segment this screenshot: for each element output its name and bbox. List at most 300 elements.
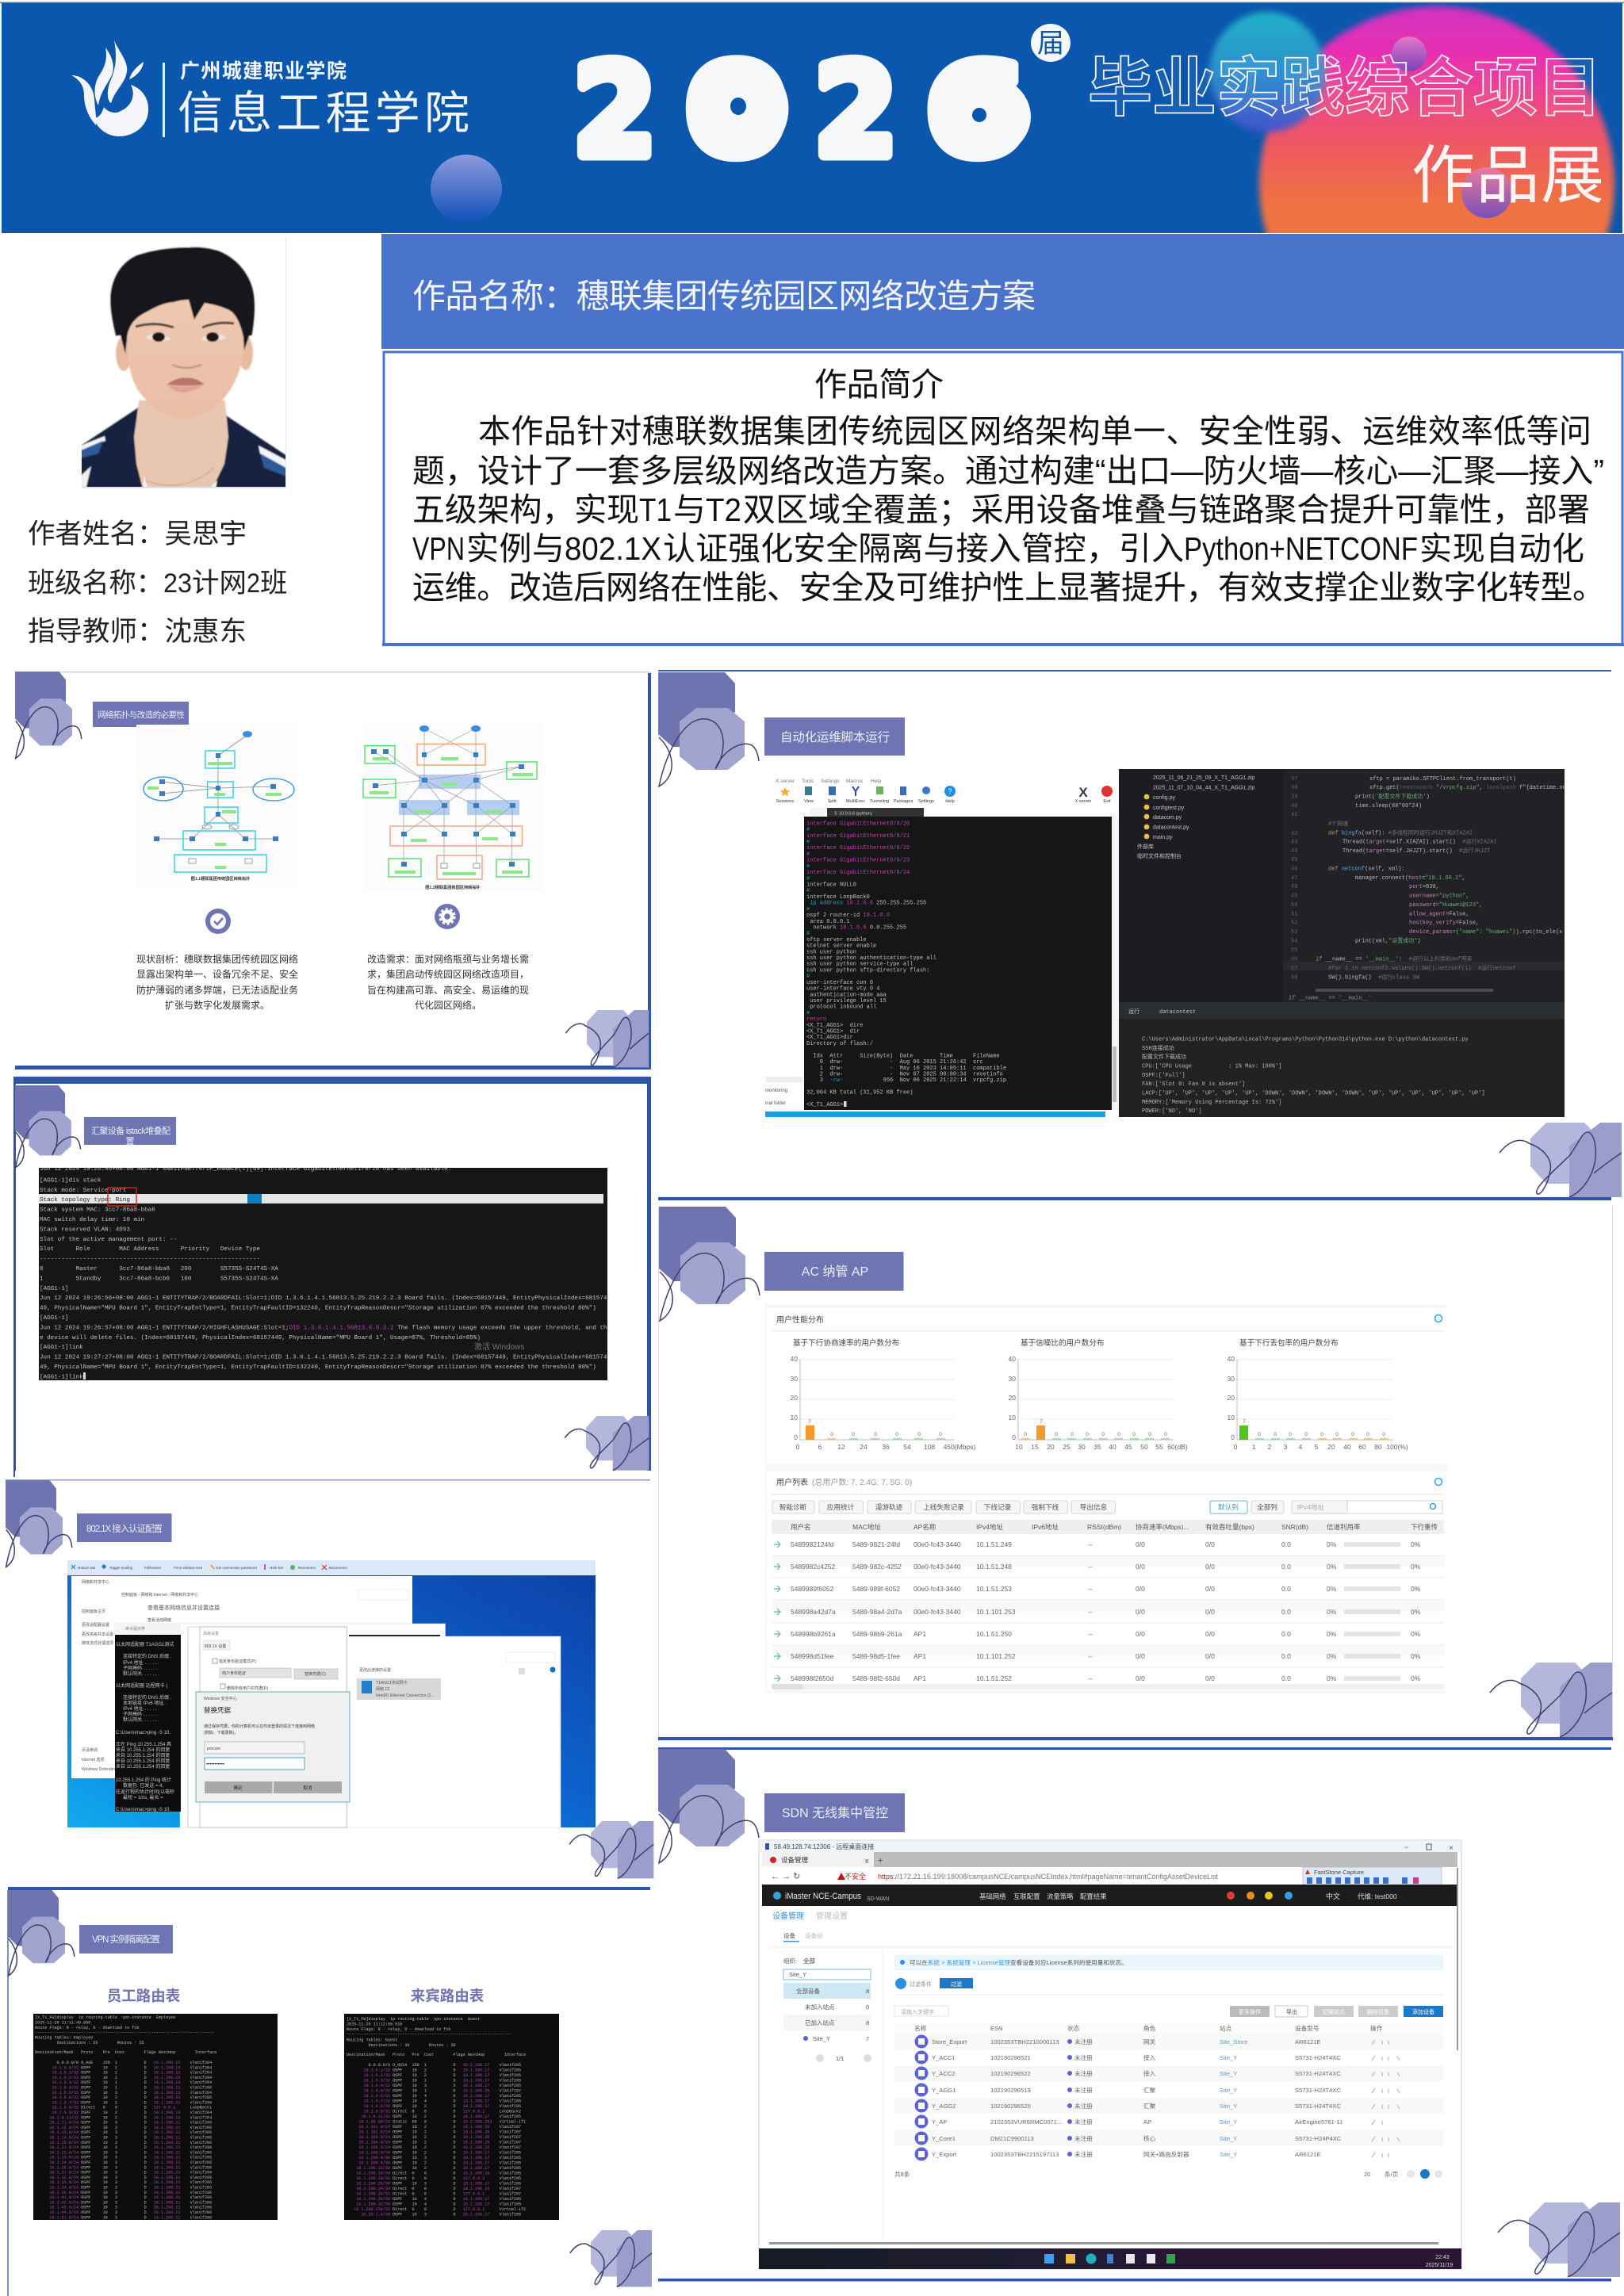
file tree: main.py — [1153, 835, 1173, 840]
card: user list: -- — [1088, 1674, 1093, 1682]
bar chart: packet loss rate: 0 — [1304, 1432, 1308, 1437]
source code: if __name__ == '__main__': #运行以上的类和def用来 — [1316, 955, 1472, 962]
device table: Site_Store — [1220, 2038, 1247, 2045]
card: user list: MAC地址 — [852, 1523, 881, 1531]
source code: device_params={"name": "huawei"}).rpc(to_ele(x — [1409, 929, 1562, 936]
panel heading label: 汇聚设备 istack堆叠配 — [91, 1125, 170, 1136]
card: user list: -- — [1088, 1563, 1093, 1571]
source code: 51 — [1291, 912, 1297, 918]
terminal: guest routing table: 10.1.0.6/32 OSPF 10 4 D 10.1.200.17 Vlanif205 — [347, 2094, 521, 2099]
card: user list: 00e0-fc43-3440 — [914, 1585, 961, 1593]
terminal text: <X_T1_AGG1> dire — [806, 1023, 863, 1029]
eyes — [145, 333, 227, 341]
card: user list: 0/0 — [1136, 1585, 1145, 1593]
bar chart: negotiated rate: 0 — [874, 1432, 877, 1437]
terminal: employee routing table: 10.1.0.1/32 OSPF 10 2 D 10.1.200.13 Vlanif204 — [35, 2071, 212, 2076]
file tree: datacom.py — [1153, 815, 1182, 821]
terminal text: 0 drw- - Aug 06 2015 21:26:42 src — [806, 1059, 983, 1066]
card: user list: 00e0-fc43-3440 — [914, 1540, 961, 1548]
source code: 37 — [1291, 776, 1297, 783]
device table: 1002353TBH2215197113 — [990, 2151, 1059, 2158]
device table — [894, 2023, 1443, 2178]
panel heading label — [764, 1793, 905, 1832]
card: user list: 10.1.51.250 — [976, 1630, 1012, 1638]
card: user performance distribution: 基于下行协商速率的用户数分布 — [793, 1338, 900, 1348]
screenshot: iMaster NCE-Campus device list: 58.49.128.74:12306 - 远程桌面连接 — [774, 1843, 874, 1850]
terminal: guest routing table: 10.1.0.4/32 OSPF 10 3 D 10.1.200.17 Vlanif205 — [347, 2084, 521, 2088]
screenshot: windows 802.1X credentials — [67, 1560, 596, 1827]
source code: 55 — [1291, 947, 1297, 954]
screenshot: iMaster NCE-Campus device list: 设备组 — [805, 1931, 823, 1939]
card: user list: -- — [1088, 1630, 1093, 1638]
terminal: employee routing table: 10.1.0.5/32 OSPF 10 2 D 10.1.200.13 Vlanif204 — [35, 2065, 212, 2070]
device table: 网关 — [1143, 2038, 1156, 2045]
screenshot: windows 802.1X credentials: 替换凭据 — [204, 1706, 232, 1714]
bar chart: signal to noise ratio: 0 — [1024, 1432, 1027, 1437]
terminal text: ssh user python service-type all — [806, 962, 913, 968]
source code: 40 — [1291, 803, 1297, 809]
terminal: guest routing table: 10.20.1.4/30 OSPF 10 3 D 10.1.200.17 Vlanif205 — [347, 2212, 521, 2217]
author info: 23 — [163, 568, 192, 599]
terminal: employee routing table — [33, 2014, 278, 2220]
card: user list: 0/0 — [1136, 1674, 1145, 1682]
terminal text: # — [806, 827, 810, 833]
bar chart: signal to noise ratio: 15 — [1031, 1443, 1039, 1451]
card: user list: 548998a42d7a — [791, 1608, 836, 1616]
bar chart: negotiated rate: 7 — [808, 1419, 811, 1425]
bar chart: packet loss rate: 60 — [1358, 1443, 1366, 1451]
card: user list: 0/0 — [1136, 1563, 1145, 1571]
terminal: employee routing table: 10.1.25.0/24 OSPF 10 3 D 10.1.200.21 Vlanif206 — [35, 2165, 212, 2170]
terminal text: # — [806, 863, 810, 870]
terminal screenshot: stack status: Jun 12 2024 19:26:57+08:00 AGG1-1 ENTITYTRAP/2/HIGHFLASHUSAGE:Slot=1;OID 1.3.6.1.4.1.56813.6.9.3.2 The flash memory usage exceeds the upper threshold, and th — [40, 1325, 607, 1331]
terminal text: sftp server enable — [806, 937, 867, 943]
card: user list: 5489-98b9-261a — [852, 1630, 902, 1638]
terminal text: 32,004 KB total (31,952 KB free) — [806, 1090, 913, 1096]
terminal screenshot: stack status — [39, 1166, 607, 1380]
card: user list: 全部列 — [1257, 1502, 1277, 1511]
terminal: employee routing table: 10.1.0.7/32 OSPF 10 2 D 10.1.200.21 Vlanif206 — [35, 2100, 212, 2105]
terminal: employee routing table: -------------------------------------------------------------------------- — [35, 2030, 214, 2035]
mouth — [167, 378, 205, 385]
terminal text: ssh user python — [806, 949, 856, 955]
terminal: employee routing table: 10.1.0.4/32 OSPF 10 1 D 10.1.200.21 Vlanif206 — [35, 2085, 212, 2090]
bar chart: signal to noise ratio: 0 — [1132, 1432, 1136, 1437]
terminal screenshot: stack status: [AGG1-1] — [40, 1286, 68, 1292]
terminal screenshot: stack status: e device will delete files. (Index=68157449, PhysicalIndex=68157449, PhysicalName="MPU Board 1", Usage=87%, Threshold=85%) — [40, 1335, 481, 1341]
left device tree: 全部设备 — [796, 1987, 820, 1995]
card: user list: 10.1.51.248 — [976, 1563, 1012, 1571]
panel heading label: 自动化运维脚本运行 — [780, 730, 890, 744]
source code — [1128, 776, 1570, 1115]
card: user list: 0% — [1327, 1652, 1337, 1660]
card: user list: 0.0 — [1281, 1563, 1291, 1571]
terminal screenshot: stack status: Stack mode: Service-port — [40, 1188, 126, 1194]
card: user list: 5489982c4252 — [791, 1563, 836, 1571]
bar chart: packet loss rate: 0 — [1289, 1432, 1292, 1437]
panel heading label: AC 纳管 AP — [802, 1265, 868, 1279]
card: user list: 0/0 — [1205, 1652, 1215, 1660]
screenshot: windows 802.1X credentials: 来自 10.255.1.254 的回复 — [116, 1758, 170, 1764]
screenshot: iMaster NCE-Campus device list: + — [878, 1856, 883, 1866]
screenshot: iMaster NCE-Campus device list: 2025/11/19 — [1426, 2263, 1453, 2268]
device table: Site_Y — [1220, 2103, 1237, 2110]
text: current state analysis: 防护薄弱的诸多弊端，已无法适配业务 — [136, 984, 298, 996]
terminal: employee routing table: 10.1.0.2/32 OSPF 10 2 D 10.1.200.13 Vlanif204 — [35, 2076, 212, 2080]
year 2026 — [577, 54, 1031, 162]
card: user list: 0/0 — [1205, 1563, 1215, 1571]
device table: S5731-H24T4XC — [1295, 2054, 1341, 2061]
terminal: guest routing table: 10.1.0.11/32 OSPF 10 2 D 10.1.200.17 Vlanif205 — [347, 2114, 521, 2119]
heading: employee routing table: 员工路由表 — [107, 1988, 181, 2004]
terminal: guest routing table: 10.1.0.8/32 OSPF 10 2 D 10.1.200.17 Vlanif205 — [347, 2104, 521, 2109]
screenshot: iMaster NCE-Campus device list: 导出 — [1286, 2008, 1297, 2015]
terminal: employee routing table: 10.1.15.0/24 OSPF 10 3 D 10.1.200.21 Vlanif206 — [35, 2141, 212, 2145]
bar chart: signal to noise ratio: 30 — [1078, 1443, 1086, 1451]
project introduction box — [382, 352, 1624, 646]
device table: 汇聚 — [1143, 2087, 1156, 2094]
device table: 102190296522 — [990, 2070, 1031, 2077]
terminal: employee routing table: 10.1.11.0/24 OSPF 10 3 D 10.1.200.21 Vlanif206 — [35, 2121, 212, 2126]
terminal text: interface NULL0 — [806, 882, 856, 888]
screenshot: xshell terminal: Exit — [1103, 799, 1111, 804]
terminal: guest routing table: 10.1.200.4/30 OSPF 10 3 D 10.1.200.17 Vlanif205 — [347, 2156, 521, 2160]
device table: 未注册 — [1074, 2134, 1093, 2142]
terminal screenshot: stack status: Jun 12 2024 19:26:46+08:00 AGG1-1 %%01IFNET/4/IF_ENABLE(t)[69]:Interface GigabitEthernet1/0/28 has been available. — [40, 1166, 452, 1173]
device table: Store_Export — [932, 2038, 967, 2045]
screenshot: iMaster NCE-Campus device list: ← → ↻ — [771, 1872, 800, 1881]
panel: VPN instance isolation — [7, 1887, 652, 2296]
bar chart: packet loss rate: 30 — [1228, 1375, 1235, 1383]
screenshot: windows 802.1X credentials: 最短 = 1ms, 最长 = — [123, 1794, 163, 1800]
bar chart: negotiated rate: 0 — [852, 1432, 855, 1437]
terminal: guest routing table: 10.1.200.0/30 OSPF 10 2 D 10.1.200.17 Vlanif205 — [347, 2150, 521, 2155]
device table: Y_Core1 — [932, 2135, 956, 2142]
terminal text: user-interface con 0 — [806, 980, 873, 986]
device table: 20 — [1364, 2171, 1370, 2178]
device table: 102190296519 — [990, 2087, 1031, 2094]
terminal: guest routing table: 10.1.200.16/30 Direct 0 0 D 10.1.200.18 Vlanif205 — [347, 2171, 521, 2175]
screenshot: xshell terminal: Sessions — [776, 799, 795, 804]
screenshot: windows 802.1X credentials: ••••••••••• — [206, 1762, 224, 1767]
screenshot: windows 802.1X credentials: 控制面板主页 — [82, 1609, 105, 1614]
card: user list: 0/0 — [1205, 1608, 1215, 1616]
terminal text: interface GigabitEthernet0/0/21 — [806, 833, 910, 840]
device table: 操作 — [1370, 2024, 1383, 2032]
bar chart: signal to noise ratio: 40 — [1109, 1443, 1116, 1451]
screenshot: windows 802.1X credentials: 来自 10.255.1.254 的回复 — [116, 1763, 170, 1770]
device table: AP — [1143, 2118, 1151, 2126]
bar chart: negotiated rate: 12 — [837, 1443, 845, 1451]
introduction heading: 作品简介 — [814, 366, 944, 403]
panel: aggregation istack configuration — [13, 1077, 651, 1471]
terminal: guest routing table: 10.1.200.20/30 OSPF 10 3 D 10.1.200.17 Vlanif205 — [347, 2182, 521, 2187]
device table: 核心 — [1143, 2134, 1156, 2142]
terminal text: <X_T1_AGG1>dir — [806, 1035, 853, 1041]
source code: def bingfa(self): #多线程同时运行JHJZT和XIAZAI — [1328, 829, 1473, 837]
terminal: employee routing table: 10.1.0.9/32 OSPF 10 2 D 10.1.200.13 Vlanif204 — [35, 2110, 212, 2115]
card: user list: 0.0 — [1281, 1630, 1291, 1638]
card: user list: 5489982124fd — [791, 1540, 834, 1548]
file tree: config.py — [1153, 795, 1176, 801]
year 2026: 2 — [814, 37, 898, 185]
terminal text: # — [806, 839, 810, 845]
card: user list: 0/0 — [1205, 1540, 1215, 1548]
text: renovation requirements: 代化园区网络。 — [415, 999, 481, 1011]
introduction body text: 与 — [673, 492, 706, 528]
screenshot: windows 802.1X credentials: 删除所有用户的凭据(D) — [227, 1686, 268, 1691]
bar chart: packet loss rate — [1228, 1355, 1408, 1451]
screenshot: windows 802.1X credentials: C:\Users\mac>ping -S 10. — [116, 1808, 170, 1812]
screenshot: windows 802.1X credentials: 往返行程的估计时间(以毫秒 — [116, 1789, 174, 1795]
screenshot: iMaster NCE-Campus device list: 不安全 — [845, 1872, 866, 1881]
device table: Y_ACC1 — [932, 2054, 956, 2061]
adapter list window — [180, 1636, 561, 1827]
terminal: guest routing table: 10.1.105.0/24 OSPF 10 2 D 10.1.200.25 Vlanif207 — [347, 2145, 521, 2150]
screenshot: iMaster NCE-Campus device list: iMaster NCE-Campus — [785, 1892, 861, 1901]
bar chart: signal to noise ratio: 20 — [1009, 1394, 1016, 1402]
screenshot: xshell terminal: Help — [945, 799, 955, 804]
screenshot: iMaster NCE-Campus device list: 过滤条件 — [910, 1980, 932, 1988]
terminal: guest routing table: 10.1.0.1/32 OSPF 10 2 D 10.1.200.17 Vlanif205 — [347, 2068, 521, 2072]
panel: AC managed AP — [658, 1207, 1613, 1740]
bar chart: negotiated rate: 0 — [917, 1432, 921, 1437]
terminal: guest routing table: 10.1.200.28/30 OSPF 10 4 D 10.1.200.17 Vlanif205 — [347, 2197, 521, 2202]
source code: manager.connect(host="10.1.60.2", — [1355, 875, 1465, 882]
terminal text: network 10.1.0.0 0.0.255.255 — [806, 924, 906, 931]
bar chart: negotiated rate: 36 — [882, 1443, 890, 1451]
terminal text: interface LoopBack0 — [806, 894, 870, 901]
device table: 状态 — [1067, 2024, 1080, 2032]
file tree: datacontest.py — [1153, 825, 1189, 831]
screenshot: iMaster NCE-Campus device list — [759, 1840, 1461, 2269]
terminal: employee routing table: 10.1.21.0/24 OSPF 10 3 D 10.1.200.21 Vlanif206 — [35, 2145, 212, 2150]
source code: OSPF:['Full'] — [1142, 1073, 1185, 1079]
terminal screenshot: stack status: [AGG1-1]dis stack — [40, 1177, 102, 1184]
bar chart: packet loss rate: 0 — [1234, 1443, 1238, 1451]
screenshot: xshell terminal — [765, 769, 1119, 1117]
introduction body text — [412, 413, 1605, 606]
terminal text: user privilege level 15 — [806, 998, 887, 1004]
device table: Y_ACC2 — [932, 2070, 956, 2077]
terminal text: 3 -rw- 956 Nov 06 2025 21:22:14 vrpcfg.zip — [806, 1077, 1006, 1084]
terminal text: ospf 2 router-id 10.1.0.6 — [806, 913, 890, 919]
terminal: employee routing table: Destination/Mask Proto Pre Cost Flags NextHop Interface — [35, 2050, 216, 2055]
terminal screenshot: stack status: MAC switch delay time: 10 min — [40, 1217, 144, 1223]
terminal screenshot: stack status: Jun 12 2024 19:27:27+08:00 AGG1-1 ENTITYTRAP/2/BOARDFAIL:Slot=1;OID 1.3.6.1.4.1.56813.5.25.219.2.2.3 Board fails. (Index=68157449, EntityPhysicalIndex=681574 — [40, 1355, 607, 1361]
card: user list: 0% — [1411, 1585, 1421, 1593]
source code: print(xml,"设置成功") — [1355, 937, 1421, 945]
source code: def netconf(self, xml): — [1328, 866, 1405, 872]
panel: automated operations script — [658, 670, 1622, 1200]
introduction body text: 实现自动化 — [1419, 530, 1584, 567]
source code: 49 — [1291, 893, 1297, 899]
device table: Y_AGG2 — [932, 2103, 956, 2110]
terminal screenshot: stack status: 49, PhysicalName="MPU Board 1", EntityTrapEntType=1, EntityTrapFaultID=132240, EntityTrapReasonDescr="Storage utilization 87% exceeded the threshold 80%") — [40, 1306, 596, 1312]
card: user list: 0/0 — [1205, 1630, 1215, 1638]
card: user list: 用户名 — [791, 1523, 811, 1531]
screenshot: windows 802.1X credentials: 来自 10.255.1.254 的回复 — [116, 1752, 170, 1758]
bar chart: signal to noise ratio: 45 — [1124, 1443, 1132, 1451]
terminal text: interface GigabitEthernet0/0/20 — [806, 821, 910, 827]
screenshot: windows 802.1X credentials: 以太网适配器 T1AGG1测试 — [116, 1641, 174, 1647]
terminal: guest routing table: 10.1.0.2/32 OSPF 10 2 D 10.1.200.17 Vlanif205 — [347, 2073, 521, 2078]
device table: Site_Y — [1220, 2087, 1237, 2094]
source code: 48 — [1291, 884, 1297, 890]
card: user list: 548998b9261a — [791, 1630, 836, 1638]
device table: ESN — [990, 2025, 1003, 2032]
device table: AR6121E — [1295, 2151, 1321, 2158]
text: renovation requirements — [367, 953, 529, 1011]
card: user list: 00e0-fc43-3440 — [914, 1563, 961, 1571]
left device tree: 7 — [866, 2035, 869, 2042]
card: user list: AP名称 — [914, 1523, 936, 1531]
bar chart: negotiated rate: 20 — [791, 1394, 798, 1402]
screenshot: windows 802.1X credentials: 网络和共享中心 — [82, 1579, 109, 1585]
fastStone capture toolbar: FastStone Capture — [1314, 1869, 1364, 1876]
card: user list: 5489-98a4-2d7a — [852, 1608, 902, 1616]
screenshot: windows 802.1X credentials: 默认网关. . . . . . . — [123, 1670, 159, 1677]
bar chart: signal to noise ratio: 7 — [1040, 1419, 1043, 1425]
left device tree: 全部 — [803, 1957, 815, 1965]
panel: network topology — [15, 672, 651, 1070]
terminal: employee routing table: 10.1.0.3/32 OSPF 10 1 D 10.1.200.13 Vlanif204 — [35, 2080, 212, 2085]
bar chart: signal to noise ratio: 0 — [1055, 1432, 1058, 1437]
device table: 接入 — [1143, 2053, 1156, 2061]
screenshot: windows 802.1X credentials: 更改此连接的设置 — [359, 1667, 391, 1673]
introduction body text: 本作品针对穗联数据集团传统园区网络架构单一、安全性弱、运维效率低等问 — [478, 413, 1591, 450]
card: user list: 0% — [1327, 1540, 1337, 1548]
card: user list: 0% — [1327, 1630, 1337, 1638]
source code: SW().bingfa() #运行class SW — [1328, 974, 1420, 982]
user table — [772, 1520, 1444, 1534]
source code: 53 — [1291, 929, 1297, 936]
screenshot: windows 802.1X credentials: Windows Defender — [82, 1767, 116, 1772]
screenshot: iMaster NCE-Campus device list: − — [1404, 1843, 1408, 1851]
screenshot: xshell terminal: Settings — [821, 779, 840, 784]
school name: 广州城建职业学院 — [180, 59, 347, 82]
screenshot: windows 802.1X credentials: 连接特定的 DNS 后缀 . — [123, 1653, 172, 1659]
device table: 接入 — [1143, 2069, 1156, 2077]
terminal screenshot: stack status: 49, PhysicalName="MPU Board 1", EntityTrapEntType=1, EntityTrapFaultID=132240, EntityTrapReasonDescr="Storage utilization 87% exceeded the threshold 80%") — [40, 1364, 596, 1371]
bar chart: packet loss rate: 0 — [1320, 1432, 1323, 1437]
card: user list: 10.1.101.252 — [976, 1652, 1016, 1660]
screenshot: windows 802.1X credentials: 控制面板 › 网络和 Internet › 网络和共享中心 — [121, 1592, 198, 1598]
source code: POWER:['NO', 'NO'] — [1142, 1108, 1202, 1115]
introduction body text: T1 — [639, 492, 672, 528]
left device tree: 1/1 — [836, 2055, 844, 2062]
screenshot: windows 802.1X credentials: 正在 Ping 10.255.1.254 具 — [116, 1741, 171, 1747]
source code: 56 — [1291, 956, 1297, 962]
terminal: employee routing table: 10.1.33.0/24 OSPF 10 3 D 10.1.200.21 Vlanif206 — [35, 2180, 212, 2185]
source code: password="Huawei@123", — [1409, 902, 1482, 909]
introduction body text: 运维。改造后网络在性能、安全及可维护性上显著提升，有效支撑企业数字化转型。 — [412, 569, 1605, 606]
screenshot: iMaster NCE-Campus device list: https://172.21.16.199:18008/campusNCE/campusNCEIndex.html#pageName=tenantConfigAssetDeviceList — [878, 1873, 1219, 1881]
bar chart: signal to noise ratio: 0 — [1086, 1432, 1089, 1437]
card: user list: AP1 — [914, 1630, 926, 1638]
screenshot: windows 802.1X credentials: 高级设置 — [203, 1631, 219, 1636]
card: user list: RSSI(dBm) — [1087, 1523, 1121, 1531]
bar chart: negotiated rate: 0 — [830, 1432, 833, 1437]
screenshot: iMaster NCE-Campus device list: 更多操作 — [1239, 2008, 1261, 2015]
screenshot: windows 802.1X credentials: 替换凭据(C) — [304, 1671, 326, 1677]
screenshot: windows 802.1X credentials: 确定 — [233, 1785, 243, 1791]
source code: allow_agent=False, — [1409, 912, 1469, 918]
screenshot: iMaster NCE-Campus device list: SD-WAN — [867, 1896, 889, 1902]
neck — [134, 400, 228, 488]
bar chart: negotiated rate: 24 — [860, 1443, 868, 1451]
screenshot: windows 802.1X credentials: 网络 13 — [376, 1686, 389, 1692]
screenshot: iMaster NCE-Campus device list: 设备 — [783, 1931, 795, 1939]
terminal screenshot: stack status: Stack reserved VLAN: 4093 — [40, 1226, 130, 1233]
terminal: guest routing table: Destination/Mask Proto Pre Cost Flags NextHop Interface — [347, 2053, 526, 2057]
terminal: employee routing table: 10.1.32.0/24 OSPF 10 3 D 10.1.200.21 Vlanif206 — [35, 2175, 212, 2180]
source code: time.sleep(60*60*24) — [1355, 803, 1422, 809]
terminal text: 2 drw- - Nov 07 2025 00:00:34 resetinfo — [806, 1072, 1003, 1078]
screenshot: windows 802.1X credentials: 更改适配器设置 — [82, 1622, 109, 1628]
bar chart: signal to noise ratio: 55 — [1155, 1443, 1163, 1451]
left device tree: 已加入站点 — [805, 2019, 835, 2026]
panel heading label: VPN 实例隔离配置 — [92, 1934, 160, 1945]
panel heading label — [93, 702, 189, 727]
left device tree: 8 — [866, 1988, 869, 1995]
bar chart: negotiated rate: 450(Mbps) — [944, 1443, 975, 1451]
left device tree: 0 — [866, 2003, 869, 2011]
bar chart: packet loss rate: 1 — [1252, 1443, 1256, 1451]
source code: 41 — [1291, 812, 1297, 818]
screenshot: windows 802.1X credentials: 命令提示符 — [125, 1626, 145, 1632]
terminal: employee routing table: 10.1.51.0/24 OSPF 10 3 D 10.1.200.21 Vlanif206 — [35, 2215, 212, 2220]
bar chart: signal to noise ratio: 35 — [1094, 1443, 1101, 1451]
introduction body text: 802.1X — [565, 530, 661, 567]
bar chart: packet loss rate: 0 — [1335, 1432, 1339, 1437]
screenshot: xshell terminal: Macros — [846, 779, 864, 784]
exhibition title line 2: 作品展 — [1411, 140, 1604, 211]
source code: 54 — [1291, 939, 1297, 945]
bar chart: packet loss rate: 80 — [1374, 1443, 1382, 1451]
text: current state analysis: 现状剖析：穗联数据集团传统园区网络 — [136, 953, 298, 965]
device table: 未注册 — [1074, 2118, 1093, 2126]
source code: 38 — [1291, 785, 1297, 791]
author info — [28, 519, 287, 647]
source code: 45 — [1291, 857, 1297, 863]
card: user list: 0% — [1411, 1630, 1421, 1638]
terminal: employee routing table: 10.1.0.6/32 OSPF 10 2 D 10.1.200.21 Vlanif206 — [35, 2095, 212, 2100]
author info: 作者姓名：吴思宇 — [28, 519, 247, 549]
device table: 站点 — [1220, 2024, 1232, 2032]
terminal: employee routing table: 10.1.12.0/24 OSPF 10 3 D 10.1.200.21 Vlanif206 — [35, 2126, 212, 2130]
badge: jie — [1031, 24, 1071, 62]
screenshot: windows 802.1X credentials: Windows 安全中心 — [204, 1696, 237, 1701]
screenshot: windows 802.1X credentials: C:\Users\mac>ping -S 10. — [116, 1731, 170, 1735]
card: user list: 0.0 — [1281, 1674, 1291, 1682]
device table: 网关+路由反射器 — [1143, 2150, 1189, 2158]
device table: S5731-H24P4XC — [1295, 2135, 1342, 2142]
screenshot: windows 802.1X credentials: 连接特定的 DNS 后缀 . — [123, 1694, 172, 1701]
card: user list: 5489-9821-24fd — [852, 1540, 900, 1548]
diagram: redesigned topology — [363, 725, 542, 892]
terminal text: protocol inbound all — [806, 1004, 876, 1011]
network and sharing center window — [71, 1576, 412, 1778]
panel heading label — [764, 718, 905, 756]
source code: sftp.get(remotepath "/vrpcfg.zip", localpath f"{datetime.now — [1369, 785, 1570, 791]
screenshot: windows 802.1X credentials: 子网掩码 . . . . . . — [123, 1665, 158, 1671]
terminal: employee routing table: 10.1.42.0/24 OSPF 10 3 D 10.1.200.21 Vlanif206 — [35, 2200, 212, 2205]
card: user list: 0.0 — [1281, 1652, 1291, 1660]
bar chart: negotiated rate: 30 — [791, 1375, 798, 1383]
terminal: guest routing table: [X_T1_FW]display ip routing-table vpn-instance Guest — [347, 2017, 480, 2022]
source code: Thread(target=self.JHJZT).start() #运行JHJZT — [1342, 847, 1490, 855]
